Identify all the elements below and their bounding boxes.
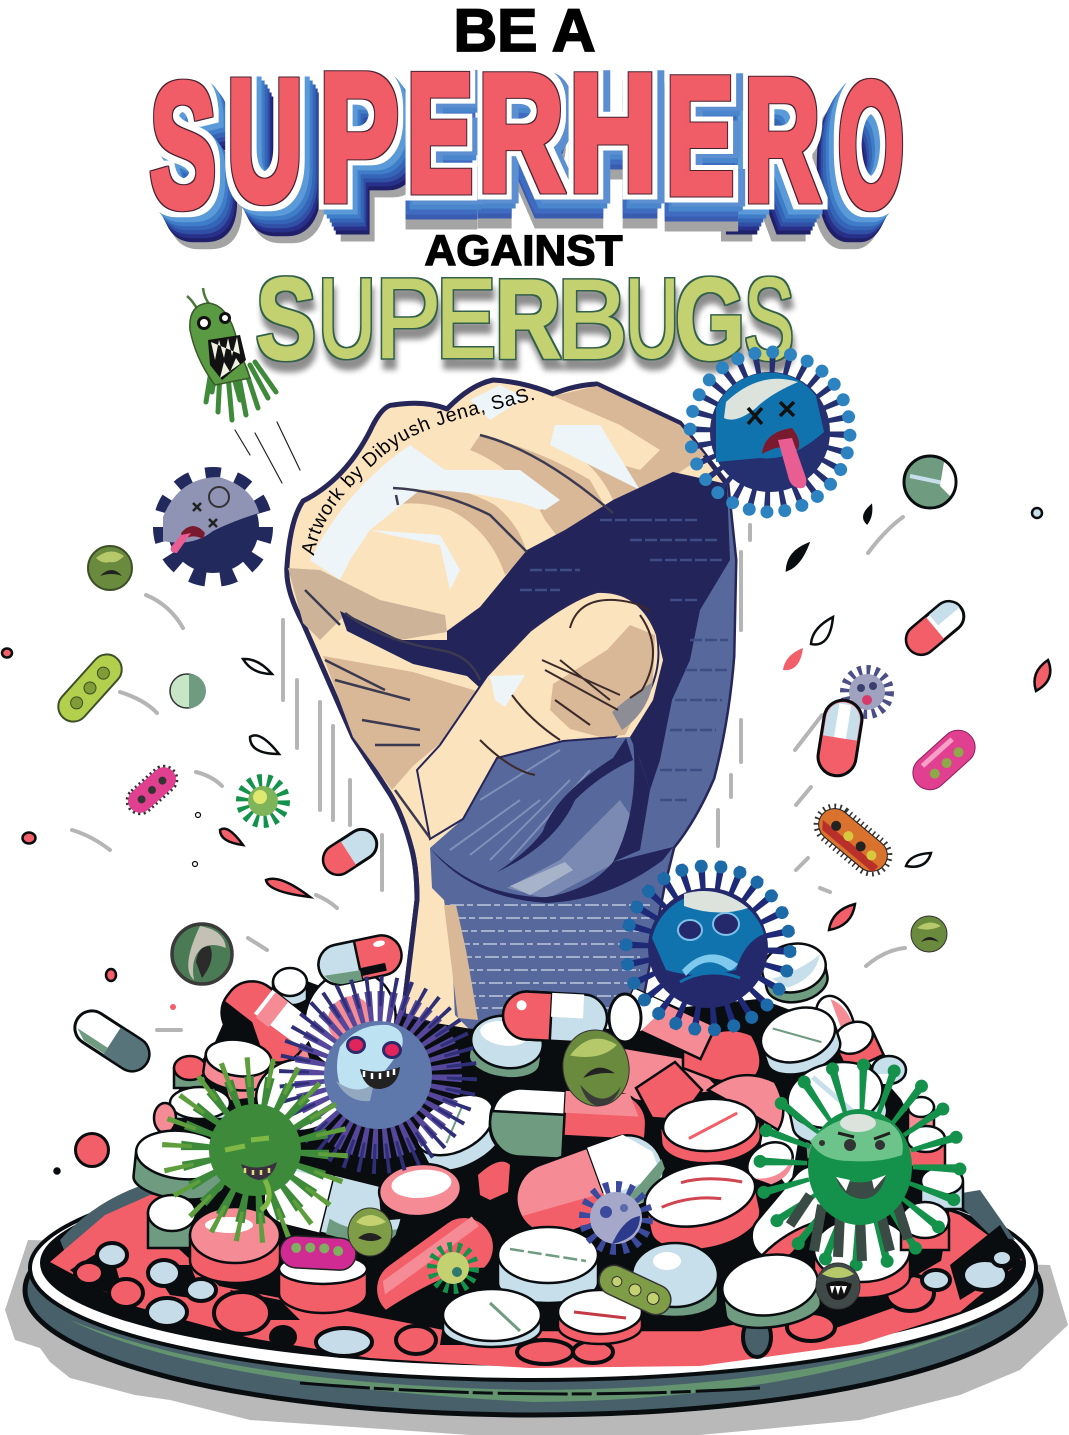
left big white tablet [132, 1126, 230, 1204]
body [190, 303, 250, 385]
tablet top right [758, 938, 832, 1008]
tan lower left palm [323, 656, 480, 790]
small tablet left low [148, 1195, 196, 1248]
heading: SUPERHERO: U [227, 43, 303, 237]
virus: green spiky [177, 1072, 333, 1228]
eyes [198, 314, 230, 328]
heading: SUPERHERO: S [150, 48, 216, 244]
far-left pink tablet [154, 1103, 176, 1133]
capsule red white right [900, 595, 970, 661]
slate lower hand and wrist [430, 484, 735, 1040]
dark inner line [300, 1383, 760, 1394]
heading: SUPERBUGS: R [495, 257, 561, 382]
antennae [187, 288, 210, 310]
white teardrop right [906, 853, 931, 867]
small rings [1032, 508, 1042, 518]
red spear drop [266, 879, 310, 897]
left white tablet [170, 1087, 230, 1119]
thumb grey tip [612, 682, 653, 730]
red culture medium [50, 1195, 1022, 1368]
large white tablet right [781, 1054, 894, 1164]
heading: SUPERBUGS: E [436, 256, 496, 381]
text: O [838, 46, 904, 244]
heading: SUPERBUGS [256, 254, 794, 384]
green reflection [70, 1320, 985, 1402]
capsule white green left [68, 1004, 156, 1078]
white tablet centre [498, 1227, 598, 1303]
tan left edge of fist [288, 568, 447, 640]
red blobs middle [636, 1062, 702, 1120]
right stack tablet 2 [907, 1126, 945, 1167]
capsule red diag [364, 1205, 506, 1331]
dish white rim [30, 1156, 1036, 1380]
tablet green right [718, 1249, 823, 1333]
virus: blue dead [690, 352, 850, 512]
red tablet left [190, 1207, 280, 1283]
capsule white right tilted [742, 1156, 848, 1270]
virus: small grey right [845, 670, 889, 714]
red tablet low [279, 1254, 367, 1313]
red drop right [1034, 660, 1050, 691]
red drop left [220, 829, 243, 845]
right stack tablet 3 [921, 1167, 963, 1209]
credit: Artwork by Dibyush Jena, SaS. [302, 388, 534, 556]
green white pill [170, 674, 206, 708]
red capsule long back [619, 988, 716, 1059]
white drop [811, 617, 833, 644]
dish inner black ring [40, 1160, 1026, 1366]
mouth [208, 335, 246, 380]
wrist hatching [450, 905, 650, 1008]
heading: SUPERBUGS: P [375, 256, 441, 381]
petri dish [25, 1156, 1041, 1415]
left palm lines and hairy crease [305, 435, 613, 838]
tablet back left [273, 968, 307, 1005]
teardrops left [243, 659, 272, 674]
thumb highlight [490, 675, 525, 707]
heading: SUPERBUGS: S [256, 254, 316, 384]
pile black base [160, 980, 950, 1330]
pink small tablet right 1 [809, 991, 861, 1055]
green white tablet top centre [466, 1011, 546, 1083]
blue green tablet [632, 1243, 718, 1317]
capsule top white red [315, 932, 405, 988]
heading: SUPERBUGS: G [675, 254, 745, 384]
right stack small [901, 1202, 949, 1250]
virus: green knobbed [760, 1065, 960, 1265]
red blob top right [683, 1030, 761, 1085]
red blob right [708, 1075, 783, 1130]
monster: green pickle [187, 288, 276, 420]
small red ovals [22, 832, 36, 844]
capsule red white falling [318, 824, 382, 880]
heading: SUPERHERO: P [319, 35, 399, 239]
capsule red white upper left [210, 970, 320, 1074]
pale lower palm [507, 800, 633, 899]
white tablet front [443, 1289, 541, 1347]
heading: SUPERHERO: R [744, 42, 820, 237]
white tablet below urchin [406, 1082, 512, 1182]
tan wrist blend [444, 905, 478, 1020]
bacterium: magenta right [906, 723, 982, 797]
virus: grey blue on pile [586, 1188, 646, 1248]
motion lines around the fist [72, 422, 905, 1030]
petri dish shadow [5, 1240, 1068, 1435]
white knuckle highlights [310, 385, 640, 590]
navy shadow between fingers [340, 472, 730, 790]
fist illustration [284, 378, 738, 1029]
pink white tablet right mid [740, 1134, 801, 1192]
tablet with red score [658, 1096, 763, 1166]
heading: SUPERBUGS: U [318, 256, 376, 381]
virus: dark mouth bottom right [816, 1263, 860, 1309]
pale tablet far right [872, 1056, 906, 1084]
virus: dark blue sad [626, 866, 790, 1030]
pink filler upper right [600, 1045, 720, 1100]
dish outer wall [25, 1165, 1041, 1415]
virus: lime small pile [433, 1248, 473, 1288]
bacterium: green on tablets [594, 1260, 676, 1320]
white tablet mid left [251, 1053, 349, 1137]
arm and fist silhouette [287, 380, 735, 1040]
heading: SUPERBUGS: S [744, 254, 794, 384]
thumb tan shading [550, 625, 655, 737]
left red tablet [174, 1056, 206, 1088]
dark palm crease [430, 738, 673, 903]
virus: purple urchin [294, 991, 462, 1159]
bacillus: lime [52, 648, 128, 728]
thumb nail line and wrinkles [480, 600, 653, 775]
green red capsule [488, 1087, 648, 1163]
bacterium: orange [812, 802, 894, 878]
white capsule left [258, 1159, 408, 1251]
white filler right [760, 1090, 800, 1190]
red splash [783, 648, 803, 670]
pink small tablet right 2 [829, 1016, 884, 1072]
cream wrist stripe [403, 888, 455, 1018]
virus: olive small pile [348, 1208, 392, 1256]
droplets in medium [75, 1243, 1012, 1364]
thumb [417, 592, 658, 839]
ring tablet [609, 994, 641, 1042]
heading: AGAINST: AGAINST [424, 227, 622, 275]
red white tablet below urchin [377, 1161, 463, 1219]
tentacles [206, 362, 276, 420]
virus: small green [243, 781, 283, 821]
red ball [76, 1134, 108, 1166]
virus: grey dead left [163, 477, 259, 573]
black comma drops [787, 506, 871, 570]
heading: SUPERHERO: H [569, 41, 657, 226]
left white pink tablet [201, 1036, 274, 1094]
fist outline redraw [403, 850, 417, 1015]
tan upper knuckle [553, 386, 705, 505]
tablet red side white top [639, 1154, 766, 1259]
heading: SUPERHERO [150, 35, 904, 244]
slate inner wall [60, 1180, 1015, 1265]
bacterium: magenta on tablet [279, 1235, 357, 1271]
virus: small green round [88, 546, 132, 590]
white teardrop left [250, 735, 279, 754]
heading: SUPERBUGS: B [556, 257, 628, 382]
virus: olive on pile [558, 1026, 634, 1110]
heading: SUPERHERO: E [666, 44, 734, 229]
pill green right [904, 456, 956, 508]
pale patch [510, 862, 573, 895]
heading: SUPERHERO: E [407, 39, 473, 227]
virus: small olive right [911, 916, 947, 952]
white tablet upper right [754, 999, 846, 1083]
small dots [54, 1168, 60, 1174]
red tablet front [558, 1290, 642, 1344]
capsule large red white [506, 1125, 674, 1245]
red drop lower right [829, 904, 855, 930]
pile of pills [132, 932, 963, 1347]
white tablet behind urchin top [291, 958, 409, 1082]
bacterium: magenta left [123, 762, 181, 818]
navy hatch highlights [520, 520, 728, 800]
heading: SUPERHERO: R [478, 41, 564, 226]
right stack tablet 1 [908, 1097, 934, 1131]
pink bean [478, 1162, 510, 1200]
capsule red white top centre [502, 990, 608, 1044]
capsule vertical red [815, 697, 865, 779]
blue palm hatch [450, 750, 590, 860]
red tablet lower right [814, 1218, 910, 1298]
heading: SUPERBUGS: U [625, 256, 679, 381]
marble green grey [172, 924, 232, 984]
tan finger shadow [392, 435, 610, 575]
black blotches [70, 1225, 1022, 1345]
teeth [211, 337, 240, 378]
pink filler upper left [215, 1030, 320, 1100]
loose droplets [2, 506, 1050, 1174]
